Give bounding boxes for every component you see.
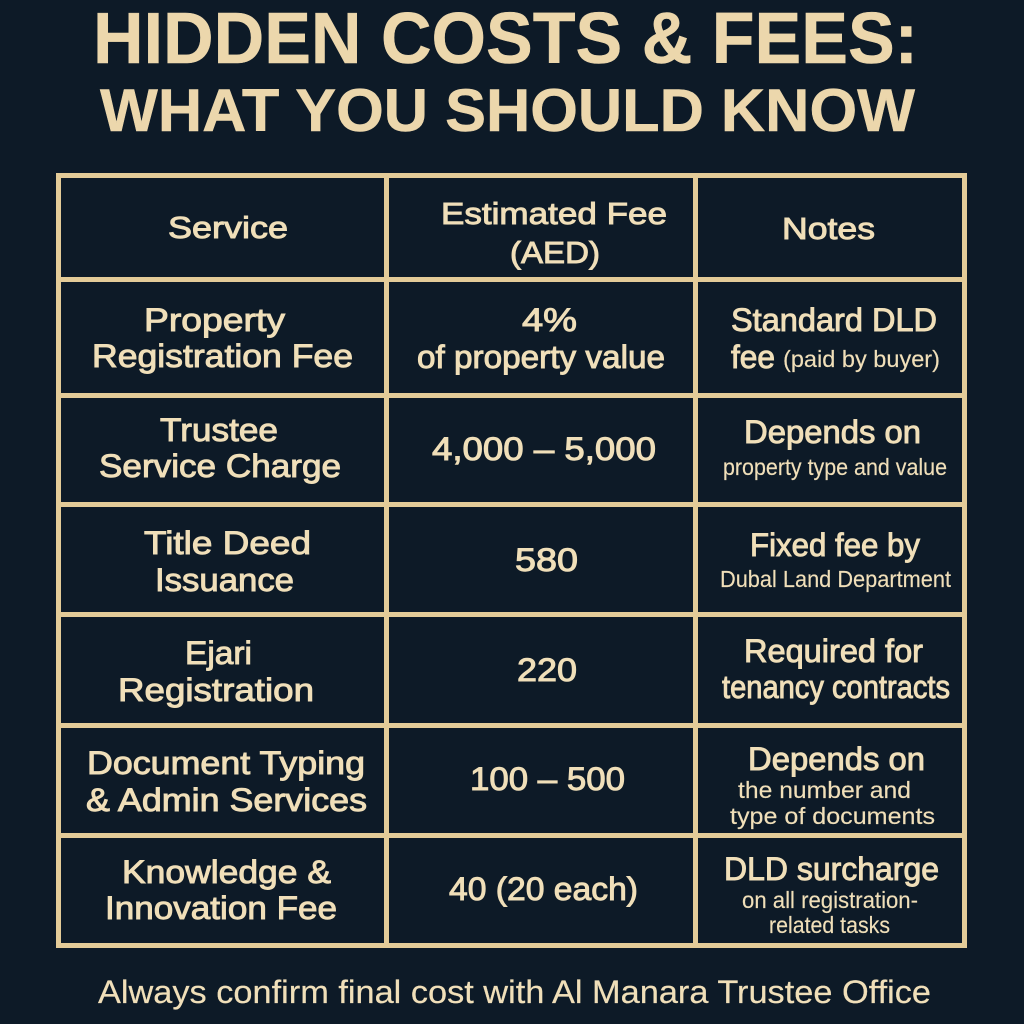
fee table xyxy=(56,173,967,948)
footer note: Always confirm final cost with Al Manara Trustee Office xyxy=(98,974,931,1010)
row: property registration fee: of property value xyxy=(417,339,665,375)
row: ejari registration: tenancy contracts xyxy=(722,669,950,705)
row: property registration fee: Registration Fee xyxy=(92,338,353,374)
row: title deed issuance: Issuance xyxy=(155,562,294,598)
row: property registration fee: (paid by buyer) xyxy=(783,346,940,372)
row: document typing and admin services: type of documents xyxy=(730,803,935,829)
row: title deed issuance: Dubal Land Department xyxy=(720,566,952,592)
row: trustee service charge: Service Charge xyxy=(99,448,341,484)
row: knowledge and innovation fee: Knowledge & xyxy=(122,854,331,890)
row: property registration fee: fee xyxy=(731,339,775,375)
row: document typing and admin services: Depends on xyxy=(748,741,925,777)
row: property registration fee: Property xyxy=(144,302,285,338)
row: knowledge and innovation fee: DLD surcharge xyxy=(724,851,939,887)
row: ejari registration: 220 xyxy=(517,652,577,688)
row: document typing and admin services: the number and xyxy=(738,777,911,803)
header row: Notes xyxy=(782,211,875,246)
row: property registration fee: Standard DLD xyxy=(731,302,937,338)
row: document typing and admin services xyxy=(86,741,935,829)
row: trustee service charge: 4,000 – 5,000 xyxy=(432,431,656,467)
row: knowledge and innovation fee: 40 (20 each) xyxy=(449,871,638,907)
row: title deed issuance: 580 xyxy=(515,542,578,578)
row: title deed issuance: Title Deed xyxy=(144,525,311,561)
header row: Estimated Fee xyxy=(441,196,667,231)
row: document typing and admin services: Document Typing xyxy=(87,745,365,781)
row: title deed issuance: Fixed fee by xyxy=(750,527,920,563)
row: title deed issuance xyxy=(144,525,952,598)
header row xyxy=(168,196,875,270)
row: property registration fee xyxy=(92,302,940,375)
table grid xyxy=(56,173,967,948)
row: trustee service charge: Trustee xyxy=(160,412,278,448)
title: WHAT YOU SHOULD KNOW xyxy=(100,77,915,144)
row: trustee service charge: Depends on xyxy=(744,414,921,450)
row: trustee service charge: property type and value xyxy=(723,454,947,480)
row: document typing and admin services: 100 – 500 xyxy=(470,761,625,797)
header row: (AED) xyxy=(510,235,600,270)
row: knowledge and innovation fee xyxy=(105,851,939,938)
row: ejari registration xyxy=(118,633,950,708)
row: document typing and admin services: & Admin Services xyxy=(86,782,367,818)
title xyxy=(93,0,918,144)
row: ejari registration: Ejari xyxy=(185,635,252,671)
row: trustee service charge xyxy=(99,412,947,484)
row: knowledge and innovation fee: related tasks xyxy=(769,912,890,938)
row: knowledge and innovation fee: Innovation Fee xyxy=(105,890,337,926)
row: knowledge and innovation fee: on all registration- xyxy=(742,887,918,913)
header row: Service xyxy=(168,210,288,245)
title: HIDDEN COSTS & FEES: xyxy=(93,0,918,79)
row: ejari registration: Registration xyxy=(118,672,314,708)
row: ejari registration: Required for xyxy=(744,633,923,669)
row: property registration fee: 4% xyxy=(522,302,577,338)
